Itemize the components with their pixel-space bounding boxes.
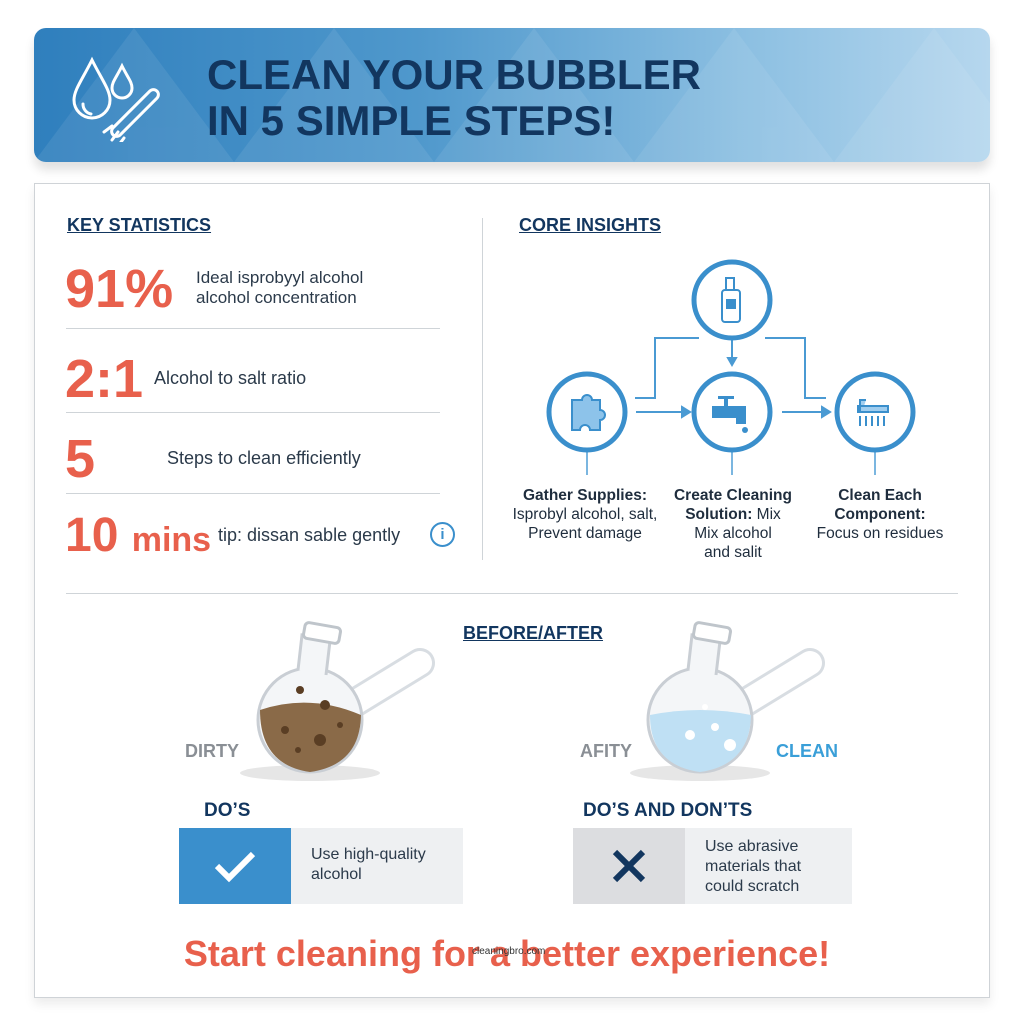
heading: CORE INSIGHTS	[519, 215, 661, 235]
title	[207, 51, 701, 144]
don't card	[573, 828, 852, 904]
label: dirty: DIRTY	[185, 741, 239, 761]
label: gather supplies: Prevent damage	[528, 525, 642, 542]
header banner	[34, 28, 990, 162]
heading: before/after: BEFORE/AFTER	[463, 623, 603, 643]
label: create cleaning solution: Create Cleaning Solution: Mix	[674, 487, 792, 523]
panel: core insights	[513, 215, 943, 561]
label: clean each component: Component:	[834, 506, 926, 523]
label: clean each component: Clean Each	[838, 487, 922, 504]
flask: clean	[630, 621, 825, 781]
do card	[179, 828, 463, 904]
stat 5: 5	[65, 429, 95, 489]
label: create cleaning solution: Mix alcohol	[694, 525, 772, 542]
stat 10 mins: i	[440, 526, 445, 543]
icon: x	[573, 828, 685, 904]
flow diagram	[546, 260, 916, 475]
stat 5	[65, 429, 361, 489]
label: gather supplies: Isprobyl alcohol, salt,	[513, 506, 657, 523]
stat 91%	[65, 259, 363, 319]
footer call to action: Start cleaning for a better experience!	[184, 933, 830, 974]
title: IN 5 SIMPLE STEPS!	[207, 97, 615, 144]
stat 2:1	[65, 349, 306, 409]
label: create cleaning solution	[674, 487, 792, 561]
stat 10 mins: tip: dissan sable gently	[218, 525, 400, 545]
stat 10 mins	[65, 509, 455, 562]
stat 91%: 91%	[65, 259, 173, 319]
don't card: could scratch	[705, 878, 799, 895]
watermark: cleaningbro.com	[472, 946, 545, 957]
label: clean each component	[817, 487, 943, 542]
flask: dirty	[240, 621, 435, 781]
heading: KEY STATISTICS	[67, 215, 211, 235]
panel: key statistics	[65, 215, 455, 562]
do card: Use high-quality	[311, 846, 426, 863]
icon: drops and brush	[72, 56, 160, 142]
stat 2:1: 2:1	[65, 349, 143, 409]
stat 91%: Ideal isprobyyl alcohol	[196, 268, 363, 287]
don't card: Use abrasive	[705, 838, 798, 855]
stat 91%: alcohol concentration	[196, 288, 357, 307]
stat 2:1: Alcohol to salt ratio	[154, 368, 306, 388]
label: afity: AFITY	[580, 741, 632, 761]
label: gather supplies: Gather Supplies:	[523, 487, 647, 504]
heading: do's: DO’S	[204, 800, 250, 821]
stat 5: Steps to clean efficiently	[167, 448, 361, 468]
do card: alcohol	[311, 866, 362, 883]
stat 10 mins: 10 mins	[65, 509, 211, 562]
label: clean each component: Focus on residues	[817, 525, 943, 542]
label: create cleaning solution: and salit	[704, 544, 762, 561]
label: gather supplies	[513, 487, 657, 542]
heading: do's and don'ts: DO’S AND DON’TS	[583, 800, 752, 821]
title: CLEAN YOUR BUBBLER	[207, 51, 701, 98]
icon: check	[179, 828, 291, 904]
don't card: materials that	[705, 858, 801, 875]
label: clean: CLEAN	[776, 741, 838, 761]
main card	[34, 183, 990, 998]
